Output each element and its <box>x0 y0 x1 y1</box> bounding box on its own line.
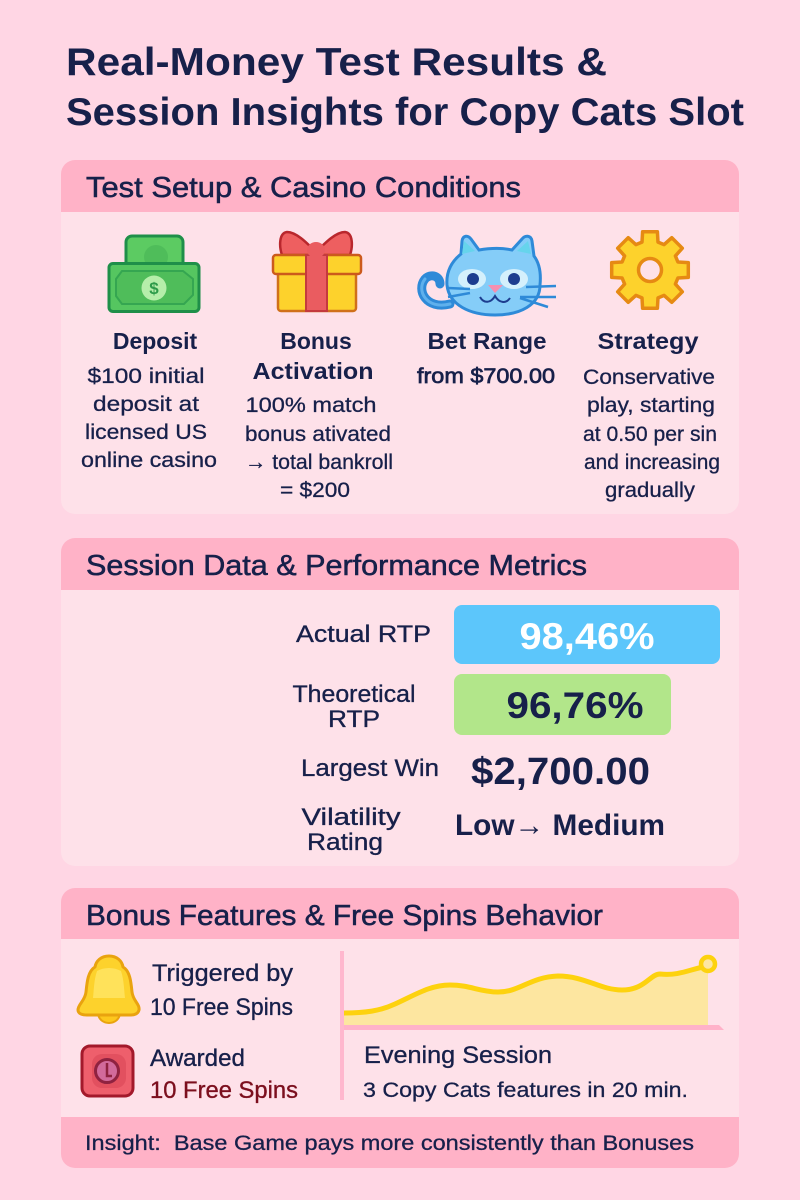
text: bonus activation <box>245 328 393 502</box>
callout: insight: Insight: Base Game pays more consistently than Bonuses <box>85 1131 694 1155</box>
text: bonus activation: Activation <box>252 358 374 384</box>
text: deposit: Deposit <box>113 328 198 354</box>
metric: theoretical RTP: RTP <box>328 706 380 733</box>
icon: cash: $ <box>149 279 159 298</box>
text: deposit: licensed US <box>85 420 207 444</box>
text: awarded: 10 Free Spins <box>150 1077 298 1104</box>
title: Session Insights for Copy Cats Slot <box>66 91 744 134</box>
text: strategy: and increasing <box>584 450 720 474</box>
icon: bell <box>78 956 139 1023</box>
panel: test setup <box>61 160 739 514</box>
heading: test setup <box>61 160 739 212</box>
chart: evening session line <box>344 957 724 1030</box>
panel: session data <box>61 538 739 866</box>
heading: test setup: Test Setup & Casino Conditions <box>86 172 521 204</box>
heading: session data <box>61 538 739 590</box>
text: bonus activation: 100% match <box>246 393 376 417</box>
text: bonus activation: = $200 <box>280 478 350 502</box>
heading: session data: Session Data & Performance Metrics <box>86 550 587 582</box>
icon: cash <box>109 236 199 312</box>
icon: gear <box>612 232 688 308</box>
metric: volatility rating: Low→ Medium <box>455 809 665 842</box>
panel: bonus features <box>61 888 739 1168</box>
icon: awarded badge <box>82 1046 133 1096</box>
text: bonus activation: Bonus <box>280 328 352 354</box>
text: deposit: $100 initial <box>88 364 204 388</box>
metric: actual RTP: 98,46% <box>520 616 654 657</box>
text: bet range: Bet Range <box>428 328 546 354</box>
icon: cat <box>422 236 556 315</box>
callout: insight <box>61 1117 739 1168</box>
metric: volatility rating: Rating <box>307 829 383 856</box>
text: awarded <box>150 1045 298 1104</box>
text: bet range <box>417 328 555 388</box>
text: triggered by: Triggered by <box>152 960 294 987</box>
text: evening session: 3 Copy Cats features in 20 min. <box>363 1078 688 1102</box>
text: strategy: gradually <box>605 478 695 502</box>
metric: volatility rating <box>302 804 665 856</box>
text: strategy <box>583 328 720 502</box>
text: awarded: Awarded <box>150 1045 245 1072</box>
heading: bonus features <box>61 888 739 939</box>
text: strategy: play, starting <box>587 393 715 417</box>
metric: theoretical RTP <box>292 674 671 735</box>
metric: theoretical RTP: 96,76% <box>506 685 644 726</box>
text: bonus activation: bonus ativated <box>245 422 391 446</box>
title <box>66 41 744 134</box>
text: bet range: from $700.00 <box>417 364 555 388</box>
text: strategy: at 0.50 per sin <box>583 422 717 446</box>
text: strategy: Conservative <box>583 365 715 389</box>
text: triggered by: 10 Free Spins <box>150 994 293 1021</box>
metric: largest win: $2,700.00 <box>471 751 650 793</box>
heading: bonus features: Bonus Features & Free Spins Behavior <box>86 900 603 932</box>
metric: theoretical RTP: Theoretical <box>292 681 416 708</box>
icon: gift <box>273 232 361 311</box>
metric: actual RTP <box>296 605 720 664</box>
text: deposit <box>81 328 217 472</box>
text: strategy: Strategy <box>598 328 699 354</box>
text: deposit: deposit at <box>93 392 199 416</box>
text: evening session: Evening Session <box>364 1042 552 1069</box>
metric: actual RTP: Actual RTP <box>296 621 431 648</box>
text: evening session <box>363 1042 688 1102</box>
title: Real-Money Test Results & <box>66 41 607 84</box>
text: triggered by <box>150 960 294 1021</box>
metric: largest win: Largest Win <box>301 755 439 782</box>
text: deposit: online casino <box>81 448 217 472</box>
metric: volatility rating: Vilatility <box>302 804 401 831</box>
text: bonus activation: → total bankroll <box>245 450 393 474</box>
metric: largest win <box>301 751 650 793</box>
divider axis <box>340 951 344 1100</box>
